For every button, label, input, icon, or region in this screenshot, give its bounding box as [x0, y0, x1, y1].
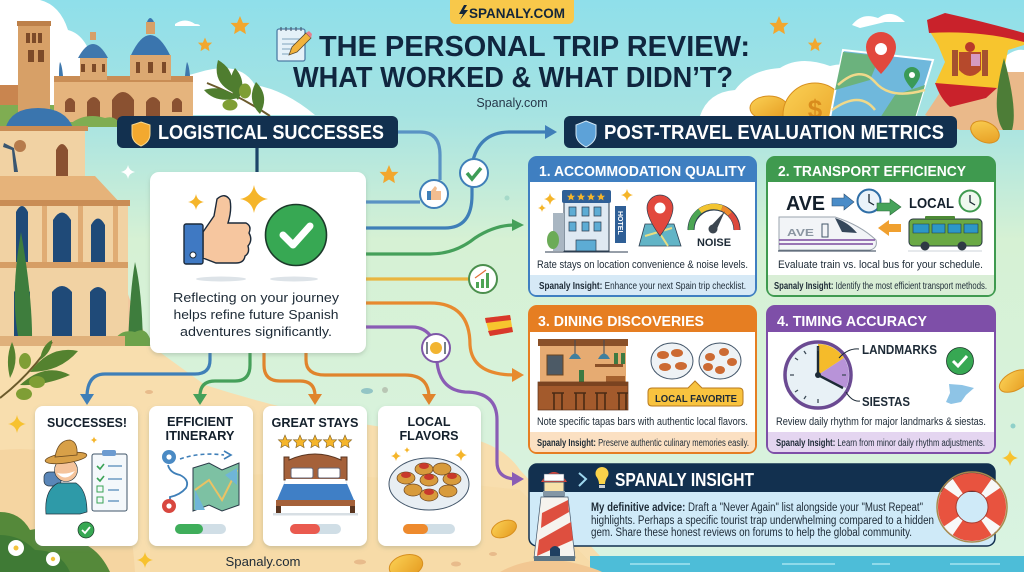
icon: orange arrow: [878, 220, 901, 236]
panel: great stays card: [263, 406, 367, 546]
text: advice: highlights. Perhaps a specific tourist trap underwhelming compared to a hidden: [591, 515, 934, 527]
olive branch top: [204, 60, 270, 116]
text: dining insight: Spanaly Insight: Preserve authentic culinary memories easily.: [537, 438, 749, 449]
icon: five stars: [278, 435, 352, 448]
coins: [387, 83, 1024, 572]
icon: hotel: [538, 189, 633, 252]
panel: efficient itinerary card: EFFICIENT: [167, 414, 233, 429]
panel: transport efficiency: 2. TRANSPORT EFFICIENCY: [778, 163, 966, 180]
text: landmarks label: LANDMARKS: [862, 343, 937, 357]
progress pill: [290, 524, 341, 534]
text: accommodation insight: Spanaly Insight: Enhance your next Spain trip checklist.: [539, 281, 746, 292]
text: accommodation description: Rate stays on location convenience & noise levels.: [537, 259, 748, 271]
icon: blue arrow: [832, 194, 854, 210]
text: siestas label: SIESTAS: [862, 395, 910, 409]
icon: noise gauge: NOISE: [697, 237, 731, 249]
icon: check: [946, 348, 974, 374]
text: reflection: [173, 290, 339, 339]
icon: AVE train: AVE: [787, 228, 814, 239]
panel: successes card: [35, 406, 138, 546]
panel: accommodation quality: 1. ACCOMMODATION QUALITY: [539, 163, 746, 180]
heading: logistical successes: [117, 116, 398, 148]
text: local label: LOCAL: [909, 195, 954, 212]
badge: site name: [450, 0, 574, 24]
callout: local favorite: LOCAL FAVORITE: [655, 393, 737, 405]
text: advice: [591, 502, 934, 539]
icon: plate badge: [422, 334, 450, 362]
icon: check badge: [460, 159, 488, 187]
icon: tapas plates: [651, 343, 741, 379]
icon: green check: [266, 204, 326, 282]
panel: local flavors card: [378, 406, 481, 546]
icon: small Spanish flag: [485, 315, 513, 336]
icon: location pin on map: [639, 195, 681, 246]
icon: travel map with pin: [830, 32, 933, 118]
icon: check: [78, 522, 94, 538]
icon: green clock: [960, 190, 980, 212]
arrowheads: [80, 125, 557, 486]
text: footer site name: Spanaly.com: [226, 554, 300, 569]
heading: post-travel metrics: POST-TRAVEL EVALUATION METRICS: [604, 121, 944, 144]
icon: noise gauge: [691, 206, 737, 249]
panel: timing accuracy: [767, 306, 995, 453]
heading: logistical successes: LOGISTICAL SUCCESSES: [158, 121, 384, 144]
icon: thumbs up: [184, 185, 268, 282]
panel: local flavors card: LOCAL: [408, 414, 451, 429]
olive branch lower left: [0, 340, 78, 400]
panel: spanaly insight: SPANALY INSIGHT: [615, 470, 754, 490]
icon: Spain silhouette: [946, 384, 974, 404]
panel: dining discoveries: 3. DINING DISCOVERIES: [538, 313, 704, 330]
icon: bed: [273, 454, 358, 516]
icon: AVE train: [778, 217, 876, 251]
title: WHAT WORKED & WHAT DIDN’T?: [293, 62, 733, 94]
text: dining description: Note specific tapas bars with authentic local flavors.: [537, 416, 748, 428]
icon: light bulb: [596, 467, 608, 488]
icon: hotel: HOTEL: [616, 211, 623, 235]
icon: green arrow: [877, 199, 901, 215]
panel: efficient itinerary card: ITINERARY: [166, 428, 235, 443]
icon: blue clock: [858, 190, 880, 212]
text: reflection: helps refine future Spanish: [174, 307, 338, 322]
text: reflection: adventures significantly.: [180, 324, 332, 339]
panel: timing accuracy: 4. TIMING ACCURACY: [777, 313, 927, 330]
progress pill: [403, 524, 455, 534]
icon: tapas plate: [389, 447, 469, 510]
left building illustration: [0, 108, 152, 346]
icon: lighthouse: [534, 472, 575, 561]
icon: clock with segments: [785, 342, 860, 408]
panel: spanaly insight: [529, 464, 995, 546]
coins: $: [808, 94, 823, 124]
title: THE PERSONAL TRIP REVIEW:: [319, 31, 750, 63]
icon: chevron: [579, 473, 586, 486]
icon: thumb badge: [420, 180, 448, 208]
icon: life ring: [937, 472, 1007, 542]
cathedral illustration: [0, 18, 193, 127]
panel: dining discoveries: [529, 306, 756, 453]
progress pill: [175, 524, 226, 534]
panel: successes card: SUCCESSES!: [47, 415, 127, 430]
icon: notepad and pencil: [277, 27, 312, 61]
bush with flowers: [0, 512, 110, 572]
icon: Spain flag map: [927, 13, 1024, 130]
text: advice: gem. Share these honest reviews on forums to help the global community.: [591, 527, 912, 539]
subtitle: Spanaly.com: [476, 96, 548, 110]
icon: chart badge: [469, 265, 497, 293]
text: timing description: Review daily rhythm for major landmarks & siestas.: [776, 416, 986, 428]
panel: efficient itinerary card: [149, 406, 253, 546]
badge: site name: SPANALY.COM: [469, 5, 565, 21]
panel: main reflection card: [150, 172, 366, 353]
title: [293, 31, 750, 94]
text: AVE label: AVE: [786, 193, 825, 215]
icon: local bus: [908, 216, 982, 251]
text: transport description: Evaluate train vs. local bus for your schedule.: [778, 259, 983, 271]
text: timing insight: Spanaly Insight: Learn from minor daily rhythm adjustments.: [776, 438, 985, 449]
heading: post-travel metrics: [564, 116, 957, 148]
panel: transport efficiency: [767, 157, 995, 296]
panel: local flavors card: FLAVORS: [400, 428, 459, 443]
panel: great stays card: GREAT STAYS: [272, 415, 359, 430]
connector lines: [87, 132, 547, 479]
callout: local favorite: [648, 381, 743, 406]
panel: accommodation quality: [529, 157, 756, 296]
text: reflection: Reflecting on your journey: [173, 290, 339, 305]
text: advice: My definitive advice: Draft a "Never Again" list alongside your "Must Repeat": [591, 502, 923, 514]
icon: hiker with checklist: [44, 436, 127, 514]
icon: tapas bar: [538, 339, 628, 410]
icon: route and map: [162, 450, 239, 513]
